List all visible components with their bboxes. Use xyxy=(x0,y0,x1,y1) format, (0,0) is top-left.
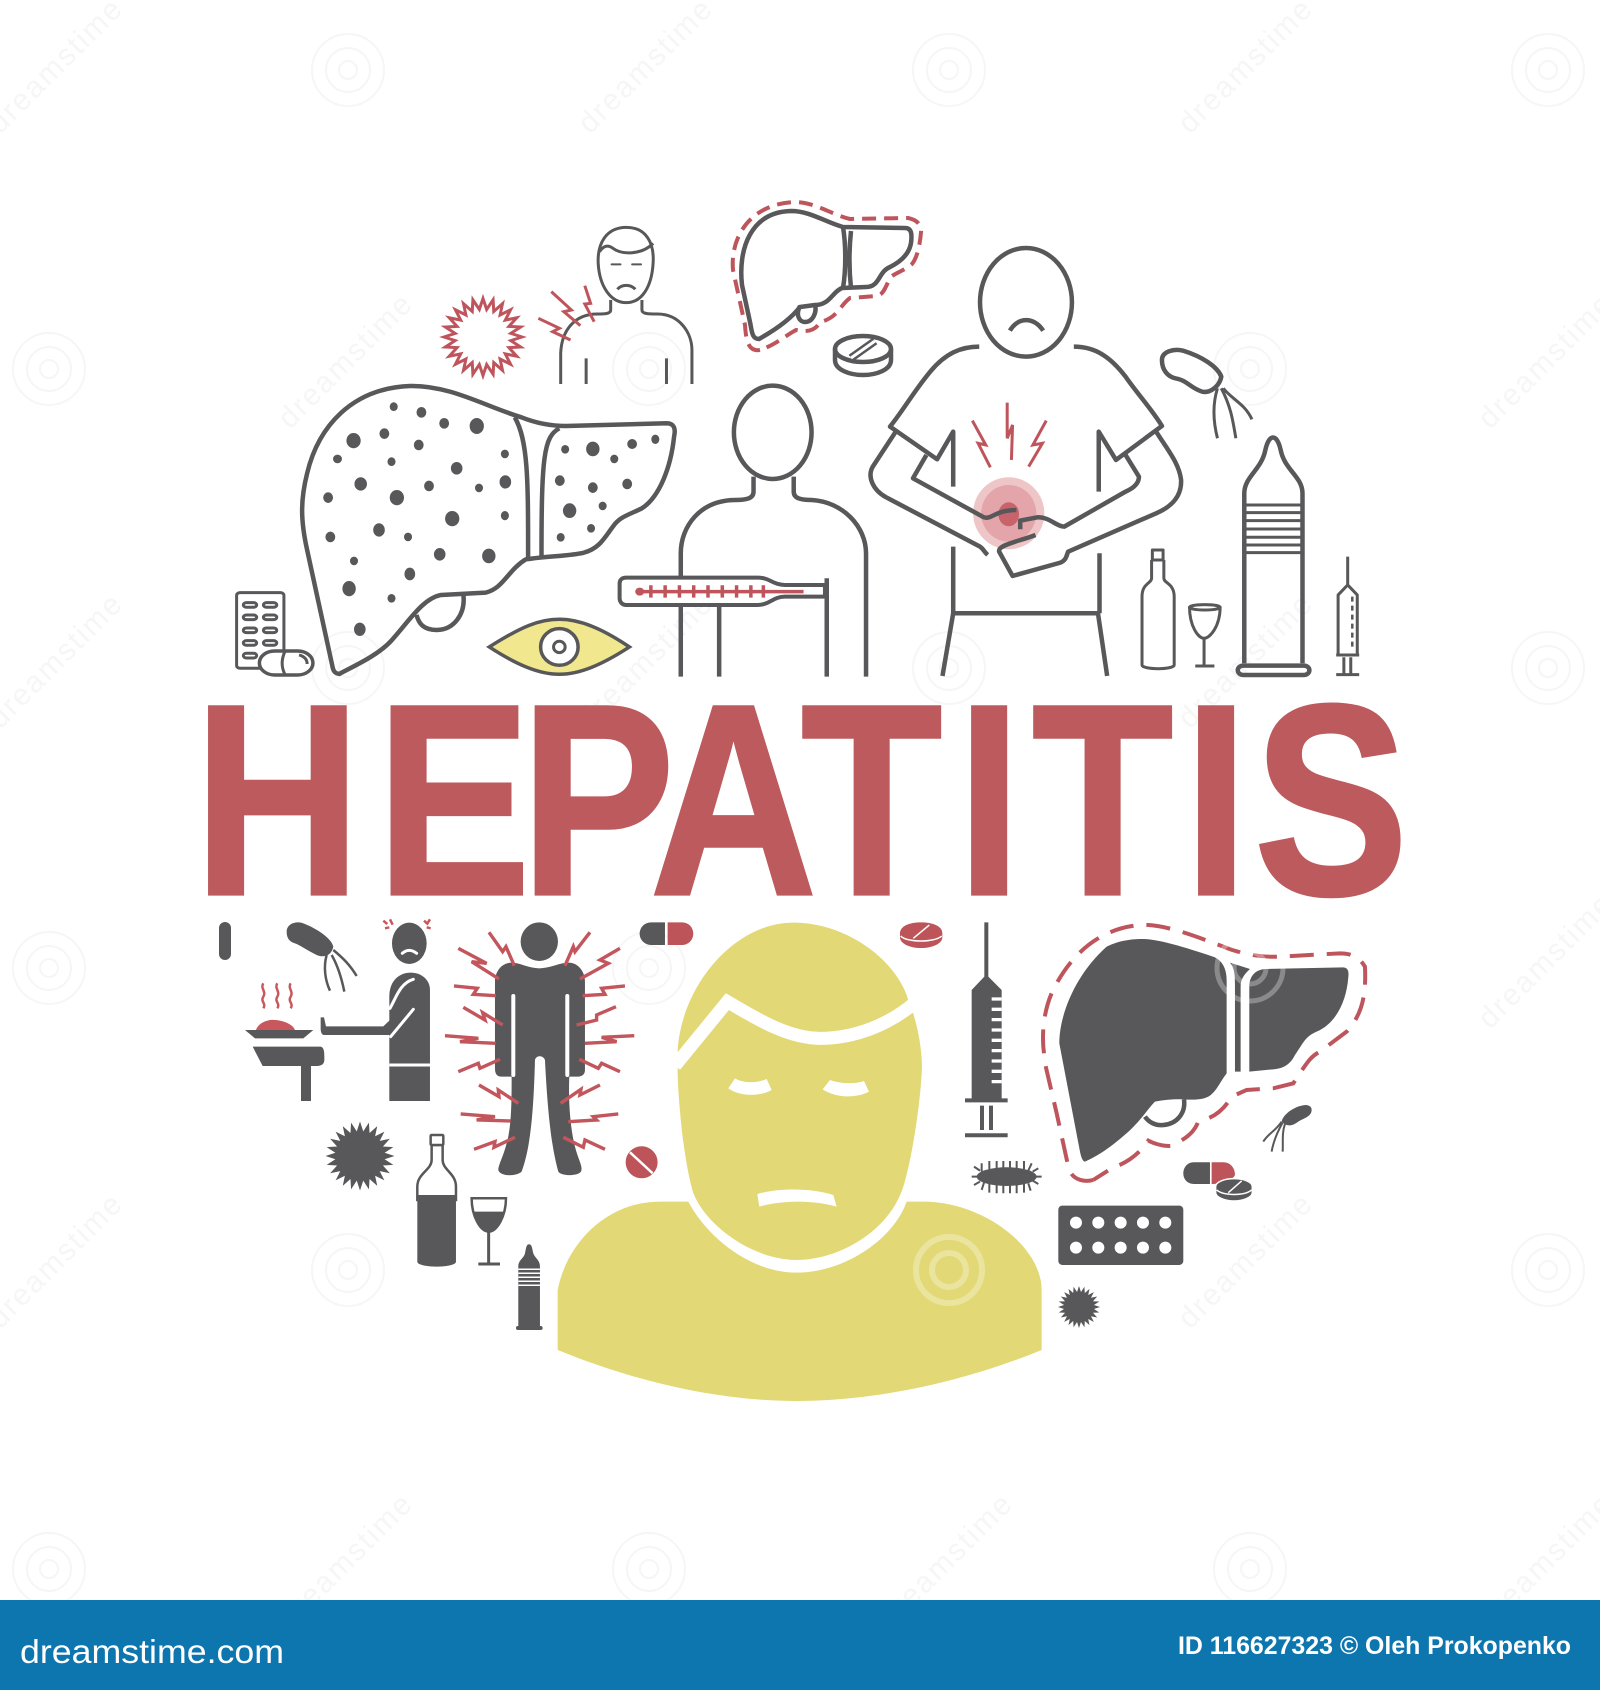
icon: person with body aches xyxy=(445,922,634,1175)
footer credit text: ID 116627323 © Oleh Prokopenko xyxy=(1178,1632,1571,1660)
icon: solid blister pack xyxy=(1058,1206,1183,1265)
icon: solid dark starburst xyxy=(326,1122,394,1190)
icon: red tablet top xyxy=(900,922,942,948)
icon: small man with shoulder pain xyxy=(538,227,692,384)
watermark spirals over artwork xyxy=(916,935,1283,1303)
icon: dark liver with red dashes xyxy=(1043,925,1365,1181)
watermark text: dreamstime xyxy=(272,1487,420,1635)
man shoulders xyxy=(558,1202,1042,1401)
watermark text: dreamstime xyxy=(572,587,720,735)
icon: yellow sad man xyxy=(558,923,1042,1401)
icon: man with stomach pain xyxy=(871,248,1181,676)
footer logo text: dreamstime.com xyxy=(20,1633,284,1670)
icon: red tablet xyxy=(626,1146,658,1178)
icon: person taking temperature xyxy=(620,386,866,677)
icon: syringe solid xyxy=(965,922,1008,1137)
icon: yellow jaundiced eye xyxy=(489,619,629,674)
icon: bottle and wine glass outline xyxy=(1142,550,1220,669)
icon: capsule and tablet pair xyxy=(1183,1162,1252,1201)
icon: condom outline xyxy=(1238,437,1309,675)
watermark text: dreamstime xyxy=(872,1487,1020,1635)
man hairline xyxy=(675,1002,913,1066)
man head xyxy=(678,923,922,1260)
watermark text: dreamstime xyxy=(272,287,420,435)
icon: red and dark capsule xyxy=(640,922,693,945)
icon: wine glass solid xyxy=(472,1198,506,1264)
icon: dish on table with steam xyxy=(245,983,324,1101)
red pain glow xyxy=(973,477,1044,549)
icon: thermometer xyxy=(620,578,825,605)
icon: blister pack and capsule outline xyxy=(237,593,313,675)
footer bar xyxy=(0,1600,1600,1690)
icon: liver outline with red dashes xyxy=(733,202,921,350)
icon: pill solid xyxy=(219,922,231,960)
man closed eyes and mouth xyxy=(728,1078,869,1207)
icon: bacterium outline xyxy=(1162,350,1252,438)
icon: bacterium solid xyxy=(287,922,357,992)
watermark text: dreamstime xyxy=(1172,587,1320,735)
icon: syringe outline xyxy=(1336,557,1359,675)
icon: condom solid xyxy=(516,1244,543,1330)
watermark text: dreamstime xyxy=(1172,1187,1320,1335)
icon: small bacterium xyxy=(1263,1105,1312,1152)
icon: red outline starburst xyxy=(444,298,522,376)
icon: nauseous person refusing food xyxy=(321,919,431,1101)
icon: spotted liver outline xyxy=(302,386,675,674)
icon: wine bottle solid xyxy=(417,1135,456,1267)
icon: rod-shaped virus xyxy=(972,1161,1042,1193)
icon: small dark starburst xyxy=(1058,1286,1100,1328)
icon: tablet outline xyxy=(835,336,891,375)
title: HEPATITIS xyxy=(194,648,1408,952)
